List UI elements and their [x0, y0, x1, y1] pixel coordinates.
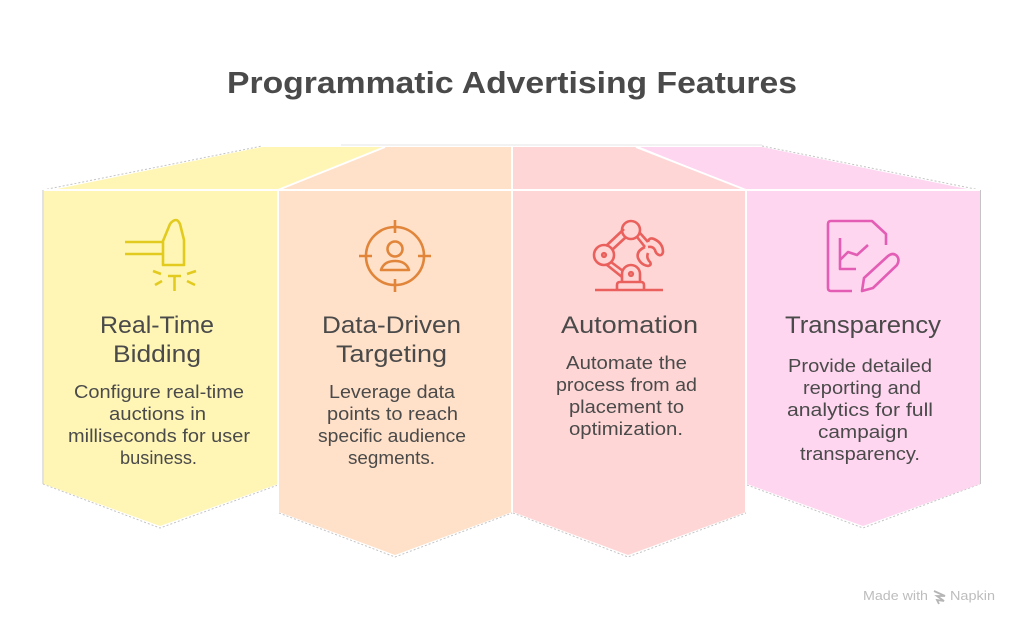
text: transparency description: Provide detailed — [788, 356, 932, 376]
text: real-time bidding description: milliseconds for user — [68, 426, 250, 446]
icon: hammer — [125, 220, 196, 291]
watermark: made with napkin — [863, 589, 995, 604]
text: automation description: Automate the — [566, 353, 687, 373]
panel: real-time bidding — [43, 146, 385, 528]
heading: data-driven targeting: Targeting — [336, 341, 447, 368]
watermark: made with napkin: Made with — [863, 589, 928, 603]
heading: real-time bidding: Bidding — [113, 341, 201, 368]
watermark: made with napkin: Napkin — [950, 589, 995, 603]
icon: report with pencil — [828, 221, 898, 291]
text: automation description — [556, 353, 697, 439]
heading: real-time bidding: Real-Time — [100, 312, 214, 339]
text: real-time bidding description: business. — [120, 448, 197, 468]
text: transparency description: campaign — [818, 422, 908, 442]
text: data-driven targeting description: specific audience — [318, 426, 466, 446]
separators between panels — [43, 145, 980, 512]
text: data-driven targeting description: Leverage data — [329, 382, 456, 402]
panel: transparency — [640, 146, 980, 528]
heading: transparency: Transparency — [785, 312, 941, 339]
title: Programmatic Advertising Features — [227, 65, 797, 100]
text: transparency description: analytics for full — [787, 400, 933, 420]
icon: audience target — [359, 220, 431, 292]
text: real-time bidding description: Configure real-time — [74, 382, 244, 402]
text: data-driven targeting description — [318, 382, 466, 468]
text: data-driven targeting description: segments. — [348, 448, 435, 468]
panel: data-driven targeting — [278, 147, 512, 557]
text: data-driven targeting description: points to reach — [327, 404, 458, 424]
text: transparency description — [787, 356, 933, 464]
text: transparency description: reporting and — [803, 378, 921, 398]
panel: automation — [513, 147, 746, 557]
heading: data-driven targeting — [322, 312, 461, 368]
text: automation description: process from ad — [556, 375, 697, 395]
text: automation description: placement to — [569, 397, 684, 417]
text: real-time bidding description — [68, 382, 250, 468]
text: automation description: optimization. — [569, 419, 683, 439]
heading: real-time bidding — [100, 312, 214, 368]
text: transparency description: transparency. — [800, 444, 920, 464]
heading: data-driven targeting: Data-Driven — [322, 312, 461, 339]
heading: automation: Automation — [561, 312, 698, 339]
text: real-time bidding description: auctions in — [109, 404, 206, 424]
icon: robot arm — [594, 221, 663, 290]
